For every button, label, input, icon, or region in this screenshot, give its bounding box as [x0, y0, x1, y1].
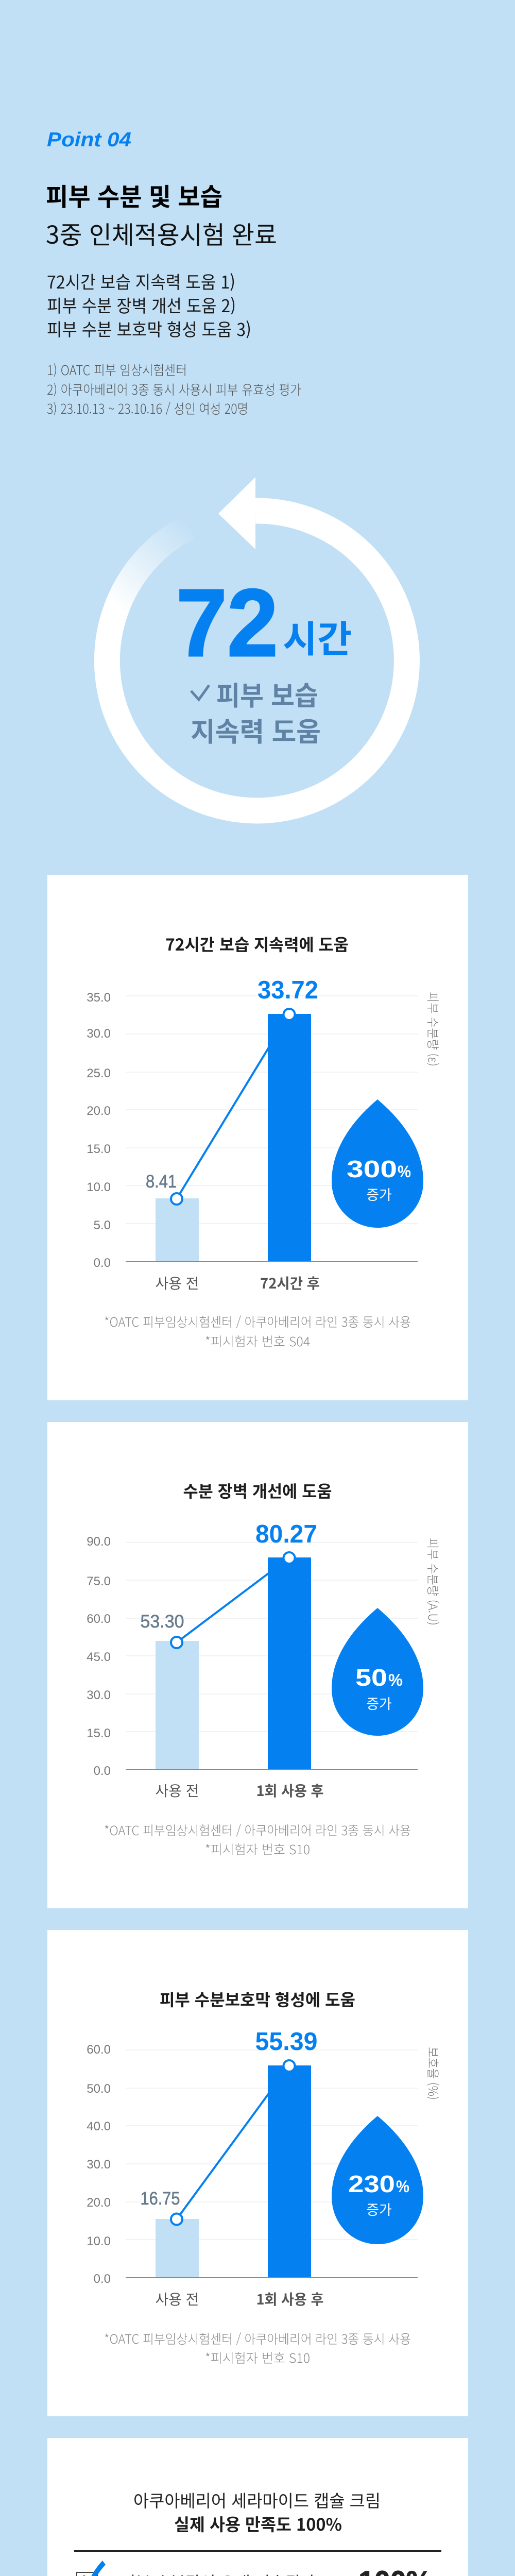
data points — [171, 1552, 295, 1648]
trend line — [177, 1558, 289, 1642]
heading: skin hydration: 피부 수분 및 보습 — [46, 177, 222, 213]
badge: 50% increase: 50 — [355, 1664, 387, 1691]
badge: 230% increase: 증가 — [366, 2199, 392, 2219]
badge: 230% increase — [332, 2116, 423, 2244]
y axis: 75.0 — [87, 1574, 111, 1588]
value: after: 33.72 — [258, 976, 318, 1004]
table rules — [74, 2550, 441, 2576]
x labels — [155, 1780, 323, 1801]
y axis: 25.0 — [87, 1066, 111, 1080]
y axis: 5.0 — [94, 1218, 111, 1232]
bar: before — [156, 1641, 199, 1770]
y axis — [87, 2043, 418, 2286]
badge: 50% increase: 증가 — [366, 1693, 392, 1713]
survey heading: 실제 사용 만족도 100% — [174, 2511, 342, 2536]
references: 2) 아쿠아베리어 3종 동시 사용시 피부 유효성 평가 — [47, 380, 301, 399]
y axis title: 보호율 (%) — [425, 2047, 443, 2100]
bar: after — [268, 2065, 311, 2278]
y axis title: 피부 수분량 (A.U) — [425, 1538, 443, 1625]
x labels: 사용 전 — [155, 1273, 199, 1293]
footnote: *피시험자 번호 S04 — [205, 1332, 310, 1350]
x labels: 1회 사용 후 — [256, 2289, 323, 2309]
footnote — [104, 1312, 411, 1350]
y axis: 30.0 — [87, 1688, 111, 1702]
y axis: 15.0 — [87, 1726, 111, 1740]
badge: 50% increase — [332, 1608, 423, 1736]
y axis — [87, 991, 418, 1270]
references: 1) OATC 피부 임상시험센터 — [47, 360, 187, 379]
footnote: *피시험자 번호 S10 — [205, 1840, 310, 1858]
y axis: 90.0 — [87, 1535, 111, 1549]
data points — [171, 2060, 295, 2225]
references — [47, 360, 301, 418]
panel: satisfaction survey — [47, 2438, 468, 2576]
claim: moisture retention: 지속력 도움 — [191, 710, 321, 749]
value: before: 53.30 — [140, 1612, 184, 1632]
y axis title: 피부 수분량 (ε) — [425, 992, 443, 1066]
bar: after — [268, 1014, 311, 1262]
benefit list — [47, 268, 251, 341]
badge: 230% increase: % — [396, 2177, 409, 2196]
survey heading: 아쿠아베리어 세라마이드 캡슐 크림 — [133, 2487, 381, 2512]
x labels — [155, 2289, 323, 2309]
badge: 300% increase — [332, 1099, 423, 1228]
badge: 300% increase: 300 — [347, 1156, 397, 1182]
bar: before — [156, 1198, 199, 1262]
icon: circular arrow ring — [107, 477, 407, 810]
panel: moisture barrier chart — [47, 1422, 468, 1908]
y axis: 15.0 — [87, 1142, 111, 1156]
trend line — [177, 2066, 289, 2219]
y axis: 30.0 — [87, 2158, 111, 2172]
benefit list: 피부 수분 보호막 형성 도움 3) — [47, 316, 251, 341]
footnote: *OATC 피부임상시험센터 / 아쿠아베리어 라인 3종 동시 사용 — [104, 1312, 411, 1331]
benefit list: 피부 수분 장벽 개선 도움 2) — [47, 292, 236, 317]
big number: 72 hours — [176, 570, 352, 676]
data points — [171, 1009, 295, 1205]
y axis: 35.0 — [87, 991, 111, 1005]
y axis: 0.0 — [94, 1764, 111, 1778]
y axis: 10.0 — [87, 2234, 111, 2248]
x labels: 1회 사용 후 — [256, 1780, 323, 1801]
references: 3) 23.10.13 ~ 23.10.16 / 성인 여성 20명 — [47, 399, 248, 418]
y axis: 45.0 — [87, 1650, 111, 1664]
survey heading — [133, 2487, 381, 2536]
x labels: 사용 전 — [155, 2289, 199, 2309]
y axis: 50.0 — [87, 2082, 111, 2096]
y axis: 10.0 — [87, 1180, 111, 1194]
y axis: 20.0 — [87, 2196, 111, 2210]
claim: moisture retention — [191, 674, 321, 749]
footnote — [104, 1821, 411, 1858]
big number: 72 hours: 시간 — [283, 609, 352, 663]
bar: before — [156, 2219, 199, 2278]
claim: moisture retention: 피부 보습 — [216, 674, 318, 713]
trend line — [177, 1014, 289, 1199]
panel: 72 hour retention chart — [47, 875, 468, 1400]
benefit list: 72시간 보습 지속력 도움 1) — [47, 268, 235, 294]
y axis: 60.0 — [87, 2043, 111, 2057]
chart title: 72시간 보습 지속력에 도움 — [165, 932, 349, 956]
chart title: 수분 장벽 개선에 도움 — [183, 1479, 332, 1502]
x labels — [155, 1273, 320, 1293]
footnote: *피시험자 번호 S10 — [205, 2348, 310, 2367]
footnote: *OATC 피부임상시험센터 / 아쿠아베리어 라인 3종 동시 사용 — [104, 2329, 411, 2348]
y axis: 40.0 — [87, 2120, 111, 2133]
bar: after — [268, 1557, 311, 1770]
badge: 230% increase: 230 — [348, 2171, 395, 2197]
y axis — [87, 1535, 418, 1778]
badge: 300% increase: % — [398, 1162, 411, 1181]
value: before: 16.75 — [140, 2189, 180, 2209]
badge: 300% increase: 증가 — [366, 1184, 392, 1204]
y axis: 0.0 — [94, 1256, 111, 1270]
value: before: 8.41 — [146, 1172, 177, 1192]
footnote: *OATC 피부임상시험센터 / 아쿠아베리어 라인 3종 동시 사용 — [104, 1821, 411, 1839]
x labels: 72시간 후 — [260, 1273, 320, 1293]
eyebrow: Point 04: Point 04 — [47, 129, 131, 151]
y axis: 0.0 — [94, 2272, 111, 2286]
row 1 — [77, 2561, 432, 2576]
y axis: 20.0 — [87, 1104, 111, 1118]
footnote — [104, 2329, 411, 2367]
subheading: triple clinical test: 3중 인체적용시험 완료 — [46, 215, 277, 251]
y axis: 60.0 — [87, 1612, 111, 1626]
y axis: 30.0 — [87, 1027, 111, 1041]
chart title: 피부 수분보호막 형성에 도움 — [160, 1987, 355, 2011]
value: after: 80.27 — [255, 1520, 317, 1548]
big number: 72 hours: 72 — [176, 570, 278, 676]
badge: 50% increase: % — [388, 1671, 403, 1689]
x labels: 사용 전 — [155, 1780, 199, 1801]
panel: moisture protective film chart — [47, 1930, 468, 2416]
value: after: 55.39 — [255, 2028, 317, 2056]
